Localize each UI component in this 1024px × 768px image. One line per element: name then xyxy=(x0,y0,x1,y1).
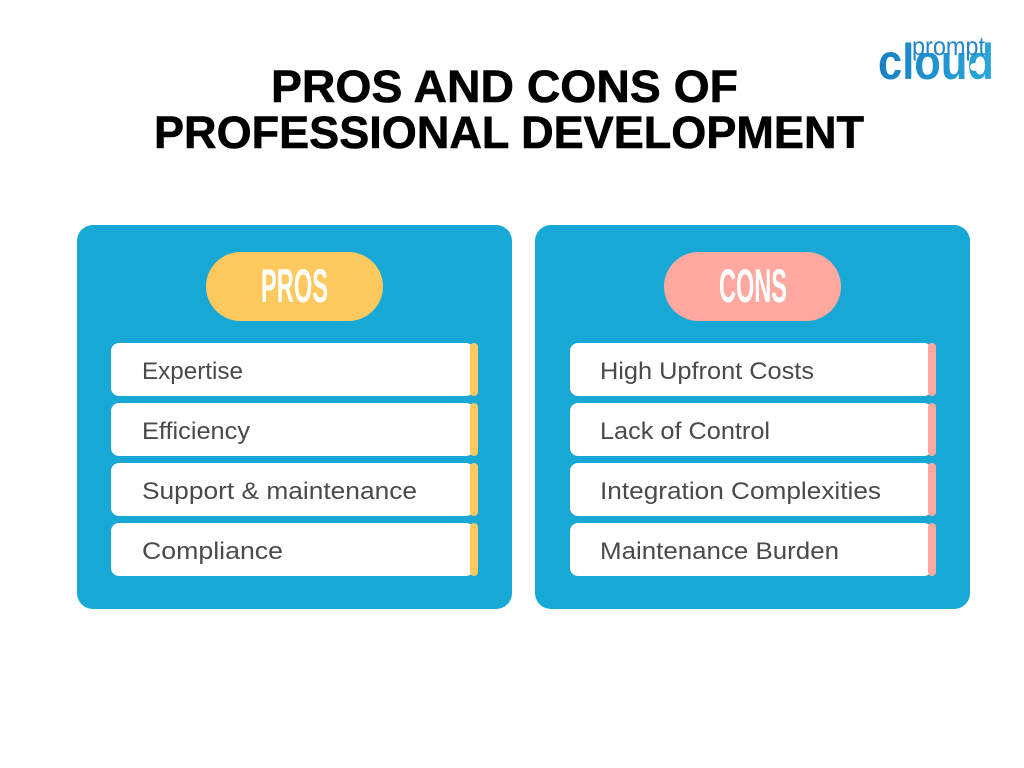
cons badge: CONS xyxy=(719,259,787,312)
con item: High Upfront Costs xyxy=(570,343,936,396)
con item: High Upfront Costs: High Upfront Costs xyxy=(600,358,814,385)
logo: PromptCloud: cloud xyxy=(878,34,994,90)
pro item: Compliance xyxy=(111,523,478,576)
pro item: Efficiency xyxy=(111,403,478,456)
pro item: Support & maintenance: Support & maintenance xyxy=(142,478,417,505)
pro item: Efficiency: Efficiency xyxy=(142,418,250,445)
con item: Integration Complexities: Integration Complexities xyxy=(600,478,881,505)
title: PROS AND CONS OF xyxy=(271,61,738,112)
con item: Lack of Control: Lack of Control xyxy=(600,418,770,445)
cons badge xyxy=(664,252,841,321)
pros badge: PROS xyxy=(261,259,328,312)
con item: Maintenance Burden: Maintenance Burden xyxy=(600,538,839,565)
con item: Lack of Control xyxy=(570,403,936,456)
pro item: Expertise xyxy=(111,343,478,396)
panel: pros xyxy=(77,225,512,609)
pros badge xyxy=(206,252,383,321)
logo: PromptCloud: prompt xyxy=(912,31,986,61)
pro item: Compliance: Compliance xyxy=(142,538,283,565)
pro item: Expertise: Expertise xyxy=(142,358,243,385)
pros list xyxy=(111,343,478,576)
con item: Integration Complexities xyxy=(570,463,936,516)
cons list xyxy=(570,343,936,576)
title: PROFESSIONAL DEVELOPMENT xyxy=(154,107,864,158)
pro item: Support & maintenance xyxy=(111,463,478,516)
con item: Maintenance Burden xyxy=(570,523,936,576)
panel: cons xyxy=(535,225,970,609)
title xyxy=(154,61,864,158)
